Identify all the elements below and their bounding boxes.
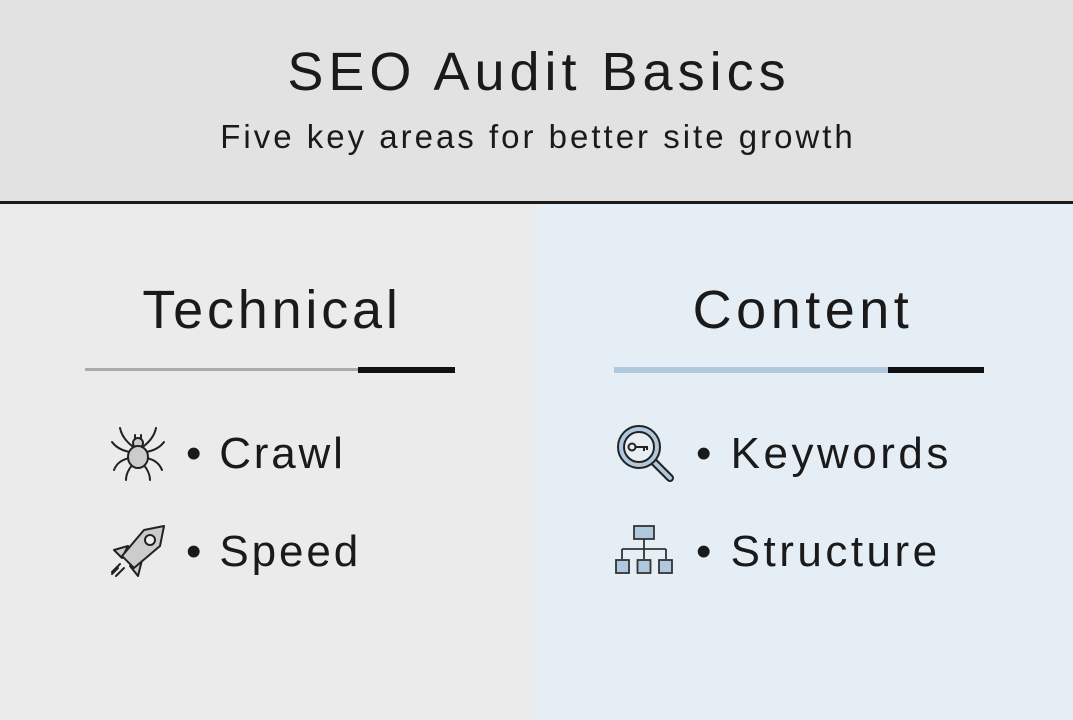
heading: content: Content <box>693 280 913 340</box>
underline <box>614 367 984 373</box>
subtitle: Five key areas for better site growth <box>220 118 856 155</box>
header <box>0 0 1073 202</box>
panel: technical <box>0 204 536 720</box>
item: speed <box>111 525 361 577</box>
heading: technical: Technical <box>142 280 402 340</box>
text: speed: • Speed <box>186 527 361 576</box>
icon: spider <box>111 427 165 481</box>
underline <box>85 367 455 373</box>
item: crawl <box>111 427 346 481</box>
panel: content <box>536 204 1073 720</box>
text: crawl: • Crawl <box>186 429 346 478</box>
icon: sitemap <box>615 525 673 574</box>
text: structure: • Structure <box>696 527 941 576</box>
item: structure <box>615 525 941 576</box>
text: keywords: • Keywords <box>696 429 952 478</box>
item: keywords <box>617 425 952 482</box>
icon: magnifier key <box>617 425 674 482</box>
icon: rocket <box>111 525 165 577</box>
title: SEO Audit Basics <box>287 42 791 102</box>
